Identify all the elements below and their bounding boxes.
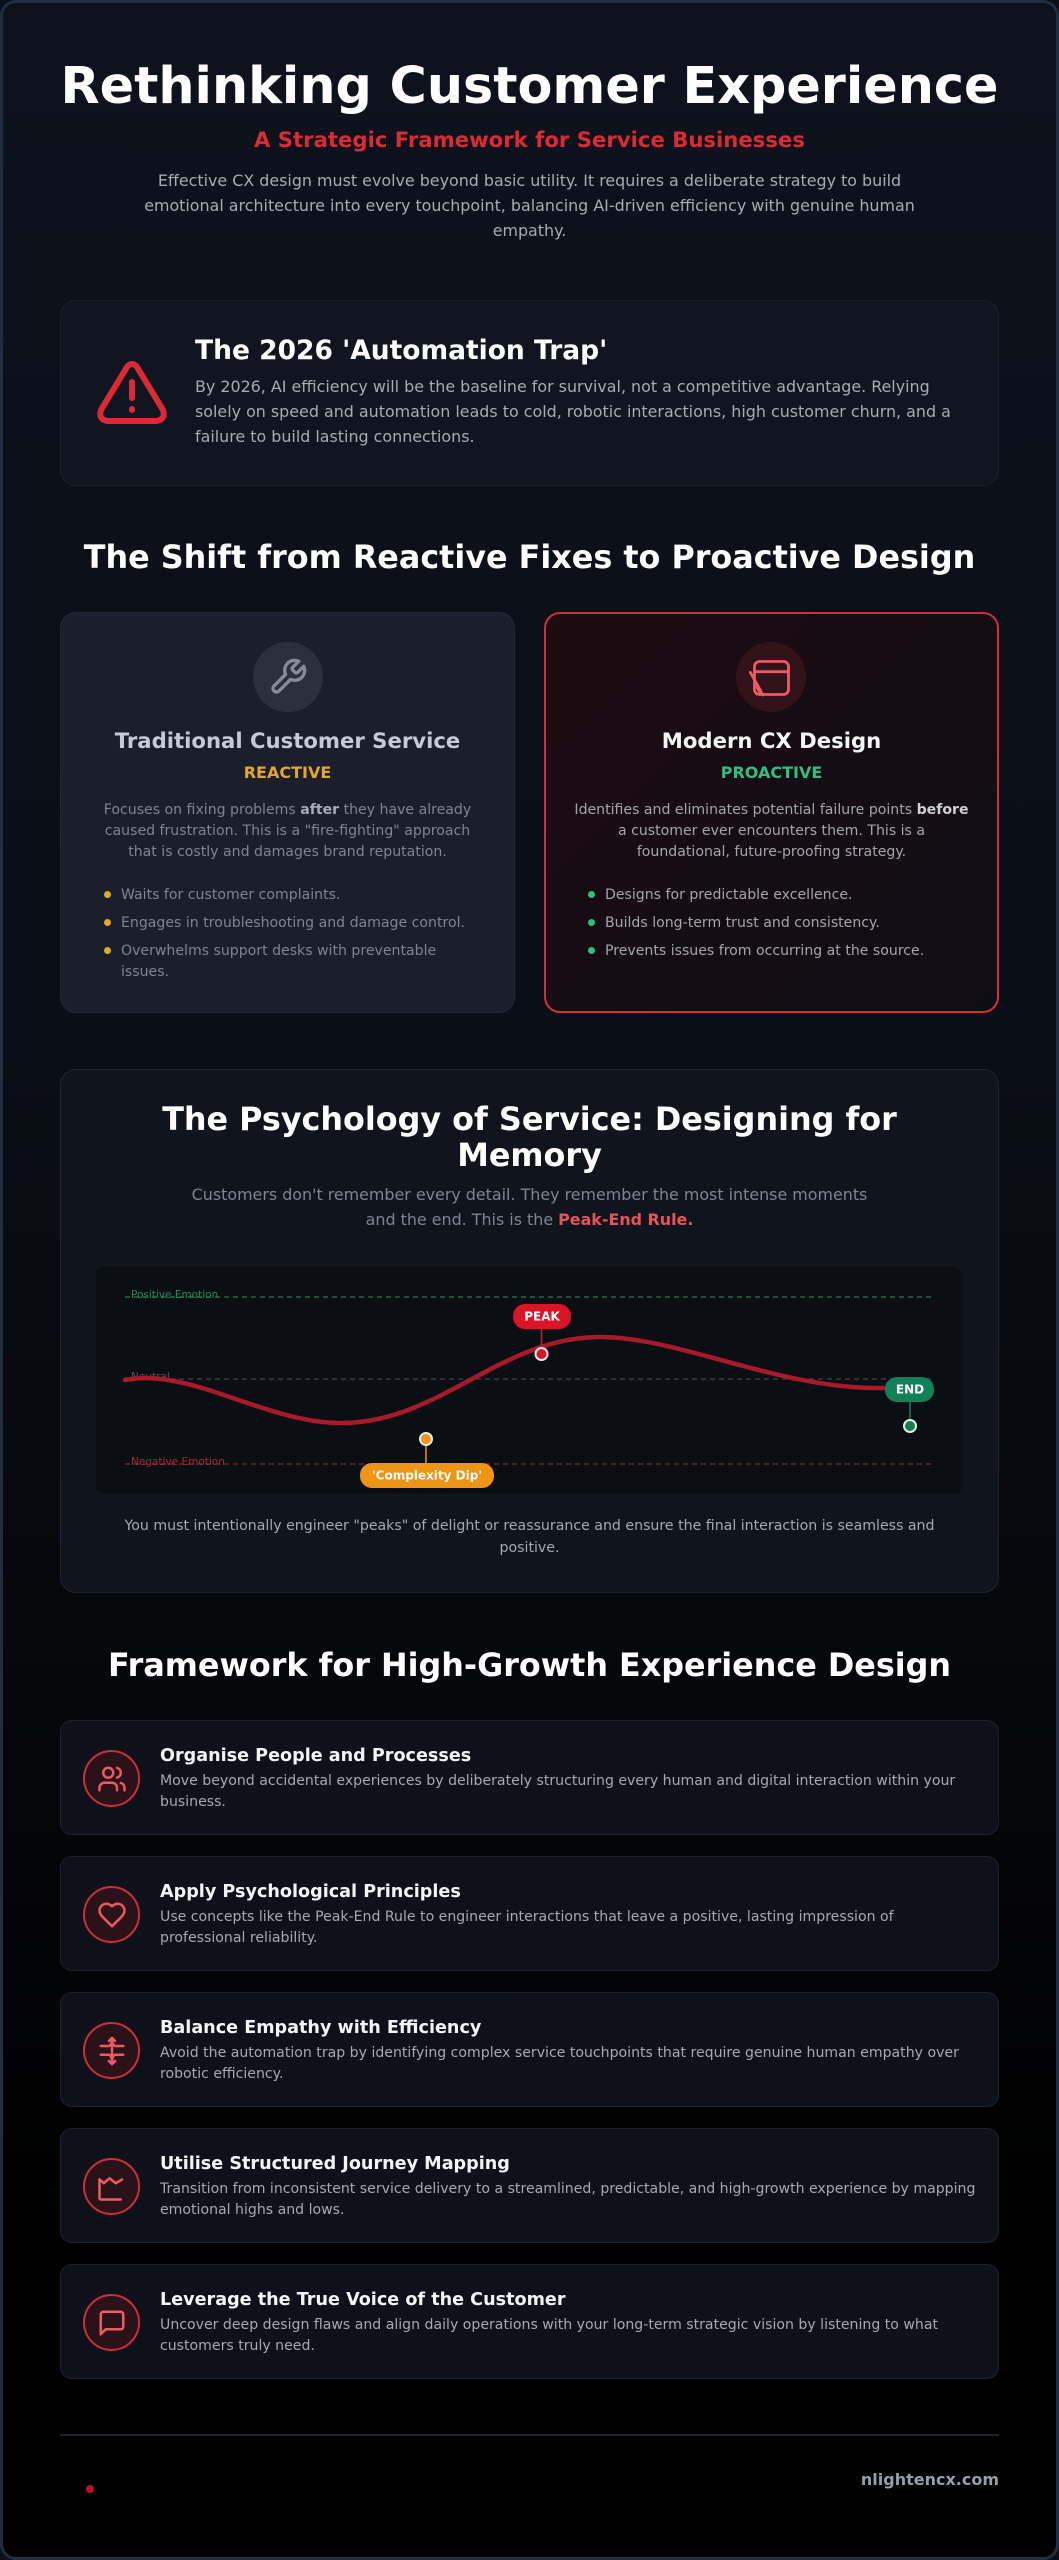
card description [574, 802, 969, 860]
footer divider [60, 2434, 999, 2436]
footer logo dot [86, 2485, 94, 2493]
icon: message [83, 2294, 140, 2351]
item heading: Utilise Structured Journey Mapping [160, 2154, 510, 2174]
section intro: and the end. This is the Peak-End Rule. [366, 1210, 693, 1229]
panel: psychology of service [60, 1069, 999, 1593]
intro text [144, 171, 915, 240]
item text: business. [160, 1794, 226, 1810]
item text: Use concepts like the Peak-End Rule to engineer interactions that leave a positive, lasting impression of [160, 1908, 894, 1924]
bullet list: Builds long-term trust and consistency. [605, 915, 880, 931]
item text [160, 2180, 975, 2218]
item heading: Apply Psychological Principles [160, 1882, 461, 1902]
chart: peak-end emotion curve: Negative Emotion [131, 1456, 225, 1468]
item text: robotic efficiency. [160, 2066, 283, 2082]
item text: professional reliability. [160, 1930, 318, 1946]
bullet list: Overwhelms support desks with preventable [121, 943, 436, 959]
item heading: Balance Empathy with Efficiency [160, 2018, 481, 2038]
item text [160, 1772, 956, 1810]
section intro [192, 1185, 867, 1229]
chart: peak-end emotion curve: Positive Emotion [131, 1289, 218, 1301]
icon: wrench [253, 642, 323, 712]
tag: proactive: PROACTIVE [721, 763, 822, 782]
chart takeaway [124, 1518, 934, 1556]
bullet list: Designs for predictable excellence. [605, 887, 853, 903]
icon: heart [83, 1886, 140, 1943]
item heading: Leverage the True Voice of the Customer [160, 2290, 566, 2310]
item text [160, 1908, 894, 1946]
framework item: voice of customer [60, 2264, 999, 2379]
bullet list [588, 887, 924, 959]
item text: emotional highs and lows. [160, 2202, 344, 2218]
framework item: balance empathy [60, 1992, 999, 2107]
card heading: Traditional Customer Service [115, 728, 460, 753]
section intro: Customers don't remember every detail. They remember the most intense moments [192, 1185, 867, 1204]
card description: Identifies and eliminates potential failure points before [574, 802, 969, 818]
item text: customers truly need. [160, 2338, 315, 2354]
alert text [195, 377, 951, 446]
card description [104, 802, 471, 860]
footer url: nlightencx.com [861, 2470, 999, 2489]
subtitle: A Strategic Framework for Service Businesses [254, 127, 805, 152]
card heading: Modern CX Design [662, 728, 881, 753]
bullet list: issues. [121, 964, 169, 980]
bullet list: Engages in troubleshooting and damage control. [121, 915, 465, 931]
chart: peak-end emotion curve [96, 1267, 962, 1494]
section heading: psychology: Memory [457, 1137, 602, 1174]
chart: peak-end emotion curve: END [896, 1382, 924, 1396]
chart: peak-end emotion curve: 'Complexity Dip' [372, 1468, 482, 1482]
icon: users [83, 1750, 140, 1807]
framework item: psychological principles [60, 1856, 999, 1971]
card description: caused frustration. This is a "fire-fighting" approach [105, 823, 470, 839]
alert heading: The 2026 'Automation Trap' [195, 335, 607, 366]
icon: design frame [736, 642, 806, 712]
item heading: Organise People and Processes [160, 1746, 471, 1766]
item text [160, 2044, 959, 2082]
section heading: framework: Framework for High-Growth Experience Design [108, 1647, 951, 1684]
card description: Focuses on fixing problems after they have already [104, 802, 471, 818]
intro text: emotional architecture into every touchpoint, balancing AI-driven efficiency with genuine human [144, 196, 915, 215]
chart takeaway: You must intentionally engineer "peaks" of delight or reassurance and ensure the final interaction is seamless and [125, 1518, 934, 1534]
alert text: failure to build lasting connections. [195, 427, 475, 446]
title: Rethinking Customer Experience [61, 56, 998, 115]
chart: peak-end emotion curve: Neutral [131, 1371, 170, 1383]
item text: Move beyond accidental experiences by deliberately structuring every human and digital interaction within your [160, 1772, 955, 1788]
bullet list [104, 887, 465, 980]
item text: Transition from inconsistent service delivery to a streamlined, predictable, and high-growth experience by mapping [160, 2180, 975, 2196]
panel: traditional customer service [60, 612, 515, 1013]
chart takeaway: positive. [500, 1540, 559, 1556]
panel: modern cx design [544, 612, 999, 1013]
framework item: organise people [60, 1720, 999, 1835]
chart: peak-end emotion curve: PEAK [524, 1310, 560, 1324]
icon: balance arrows [83, 2022, 140, 2079]
section heading: psychology: The Psychology of Service: Designing for [162, 1101, 897, 1138]
framework item: journey mapping [60, 2128, 999, 2243]
item text: Avoid the automation trap by identifying complex service touchpoints that require genuine human empathy over [160, 2044, 959, 2060]
tag: reactive: REACTIVE [244, 763, 331, 782]
panel: automation trap [60, 300, 999, 486]
item text: Uncover deep design flaws and align daily operations with your long-term strategic vision by listening to what [160, 2316, 938, 2332]
bullet list: Prevents issues from occurring at the source. [605, 943, 924, 959]
alert text: solely on speed and automation leads to cold, robotic interactions, high customer churn, and a [195, 402, 951, 421]
section heading: psychology [162, 1101, 897, 1174]
icon: warning triangle [97, 361, 167, 424]
alert text: By 2026, AI efficiency will be the baseline for survival, not a competitive advantage. Relying [195, 377, 930, 396]
item text [160, 2316, 938, 2354]
card description: foundational, future-proofing strategy. [637, 844, 906, 860]
icon: journey chart [83, 2158, 140, 2215]
intro text: Effective CX design must evolve beyond basic utility. It requires a deliberate strategy to build [158, 171, 901, 190]
bullet list: Waits for customer complaints. [121, 887, 340, 903]
card description: that is costly and damages brand reputation. [128, 844, 447, 860]
card description: a customer ever encounters them. This is a [618, 823, 925, 839]
intro text: empathy. [493, 221, 566, 240]
section heading: shift: The Shift from Reactive Fixes to Proactive Design [84, 539, 975, 576]
